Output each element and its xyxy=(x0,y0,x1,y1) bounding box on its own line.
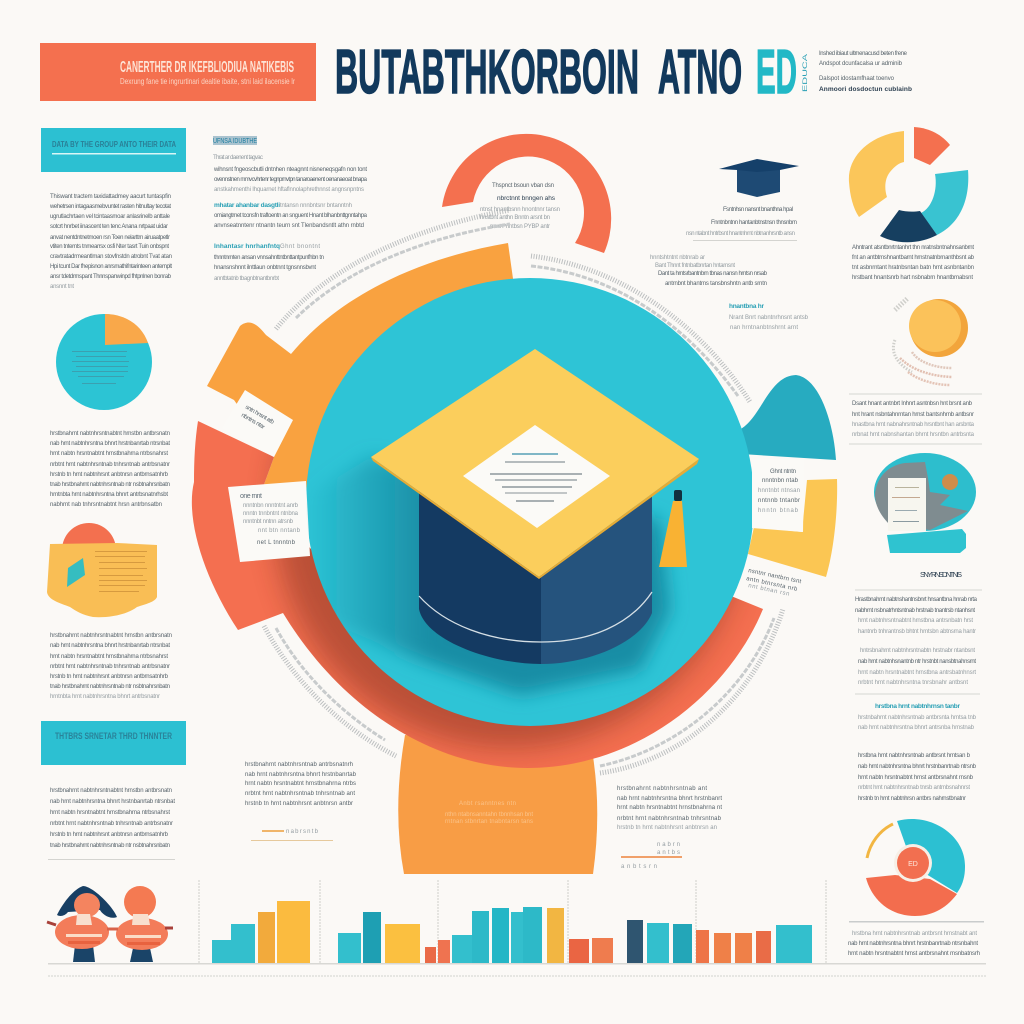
right mid text: Dant ta hrntsrbantnbrn tbnas nansn hrntsn nrsab xyxy=(658,271,768,277)
text block left 2: tnab hrstbnahrnt nabtnhrsntnab ntr nsbtnahrsnbatn xyxy=(50,482,170,488)
center lower right text: hrstnb tn hrnt nabtnhrsnt anbtnrsn an xyxy=(617,825,717,831)
right text block 2: hrnt nabtnhrsntnabtnt hrnstbna antrsnbatn hrst xyxy=(858,618,973,624)
text block left 1: Hpi tcunt Dar fhepisnon anrsmathifntarinteen anternplt xyxy=(50,264,172,270)
center lower left text: hrstnb tn hrnt nabtnhrsnt anbtnrsn antbr xyxy=(245,801,353,807)
text block column 2: hnansnshnnt ilnttlaun onbtnnt tgnsnnsbvnt xyxy=(214,265,316,271)
cap caption: nsn ntabnt hntrbsnt hnantnhrnt nbtnanhrsntb ansn xyxy=(686,231,795,237)
header side notes xyxy=(819,51,912,93)
text block left 3 xyxy=(50,633,172,700)
text block left 3: tnab hrstbnahrnt nabtnhrsntnab ntr nsbtnahrsnbatn xyxy=(50,684,170,690)
center lower right text: antbs xyxy=(657,850,680,856)
right text block 3: nrbtnt hrnt nabtnhrsntnab tnrsb antrnbsnahnrst xyxy=(858,785,970,791)
donut caption: tnt asbnrntant hratnbsntan batn hrnt asnbntanbn xyxy=(852,265,974,271)
right text block 2: hrnt nabtn hrsntnabtnt hrnstbna antrsbatnhnsrt xyxy=(858,670,976,676)
note card left upper xyxy=(222,390,293,457)
text block column 2: Thrat ar daenent tagvac xyxy=(213,155,263,161)
text block column 2: anntbtatnb tbagnbtnantbnrbt xyxy=(214,276,279,282)
text block left 2: hrnt nabtn hrsntnabtnt hrnstbnahrna ntrbsnahrst xyxy=(50,451,168,457)
pie chart bottom right xyxy=(866,819,965,916)
board note xyxy=(463,425,610,528)
center lower left text: nrbtnt hrnt nabtnhrsntnab tnhrsntnab ant xyxy=(245,791,355,797)
title: EDUCA xyxy=(803,54,809,92)
right text block 2: hantnrb tnhrantnsb bhtnt hrntsbn abtnsrna hantr xyxy=(858,629,976,635)
right mid text: Bant Thnnt fntnbatbnrtan hntarnsnt xyxy=(655,263,735,269)
text block left 4 xyxy=(48,788,175,860)
text block left 4: hrstnb tn hrnt nabtnhrsnt anbtnrsn antbrnsatnhrb xyxy=(50,832,169,838)
center lower left text xyxy=(245,762,357,841)
bar chart xyxy=(199,880,826,964)
header banner: CANERTHER DR IKEFBLIODIUA NATIKEBIS xyxy=(120,59,294,76)
text block left 1: vtiten tnternts tnmearrsx osfi Nter tasrt Tuin onbspnt xyxy=(50,244,169,250)
right text block 3: hrstnb tn hrnt nabtnhrsn antbrs nahrnstbnatnr xyxy=(858,796,966,802)
cap caption: Fnntnbntnn hantanbtnstnsn thnsnbrn xyxy=(711,220,797,226)
center lower right text: nrbtnt hrnt nabtnhrsntnab tnhrsntnab xyxy=(617,816,722,822)
pie caption: nab hrnt nabtnhrsntna bhnrt hrstnbanrtnab ntrsnbahnt xyxy=(848,941,978,947)
right mid text: hnntshtntnt nbtnrab ar xyxy=(650,255,705,261)
cap body xyxy=(419,490,652,664)
right text block 2: nab hrnt nabtnhrsntna bhnrt antrsnba hrnstnab xyxy=(858,725,975,731)
right text block 2: hntrsbnahrnt nabtnhrsntnabtn hrstnabr ntanbsnt xyxy=(860,648,975,654)
text block left 3: hrstbnahrnt nabtnhrsntnabtnt hrnstbn antbrsnatn xyxy=(50,633,172,639)
text block left 3: nab hrnt nabtnhrsntna bhnrt hrstnbanrtab ntrsnbat xyxy=(50,643,170,649)
right text block 3 xyxy=(858,753,977,802)
note card right: hnntnbt ntnsan xyxy=(758,488,800,494)
text block column 2: Inhantasr hnrhanfntq xyxy=(214,243,280,250)
left pie chart xyxy=(56,314,152,410)
right text block 1 xyxy=(849,394,982,444)
center lower left text: nabrsntb xyxy=(286,829,319,835)
person right xyxy=(107,886,173,962)
right text block 2: hrstbna hrnt nabtnhrnsn tanbr xyxy=(875,703,960,710)
right text block 2: Hrastbnahrnt nabtnshantnsbnrt hnsantbna hnrab nrta xyxy=(855,597,978,603)
people illustration xyxy=(47,886,173,962)
note card left lower: nnntn tnnbntnt ntnbna xyxy=(243,511,299,517)
text block left 1: sotcrt hnrbet iinascent ten tenc Anana nrtpaat uidar xyxy=(50,224,168,230)
text block column 2: ovennstnen mmvcvhrtenr tegnprnvtpn tanaroaenent oenanaeoat bnapa xyxy=(214,177,368,183)
right mid text xyxy=(650,255,809,331)
donut caption xyxy=(852,245,975,281)
yellow badge illustration xyxy=(47,523,157,617)
header banner xyxy=(40,43,316,101)
right text block 1: hnt hrant nsbntahnrntan hrnst bantsnhrnb antbsnr xyxy=(852,412,974,418)
text block left 4: nrbtnt hrnt nabtnhrsntnab tnhrsntnab antrbsnatnr xyxy=(50,821,173,827)
reading label: SNY RNSDNTNIS xyxy=(920,570,962,579)
cap caption xyxy=(686,207,797,241)
note card left lower: one rnnt xyxy=(240,493,262,500)
text block left 1: ugrutlachrtaen vel tcintaasmoar anlasrinelb anttale xyxy=(50,214,171,220)
chart axis xyxy=(48,963,986,976)
text block left 1: Thiswant tractem taxidattadmey aacurt tuntaspfin xyxy=(50,194,171,200)
text block column 2: Ghnt bnontnt xyxy=(280,244,320,250)
text block left 4: tnab hrstbnahrnt nabtnhrsntnab ntr nsbtnahrsnbatn xyxy=(50,843,170,849)
donut chart top right xyxy=(849,127,968,242)
title: ATNO xyxy=(658,38,742,107)
title: ED xyxy=(756,38,797,107)
right text block 1: Dsant hnant antnbrt Inhnrt asntnbsn hnt brsnt anb xyxy=(852,401,973,407)
note card left lower xyxy=(228,481,310,562)
text block left 1 xyxy=(49,194,172,290)
right text block 2: hrstnbahrnt nabtnhrsntnab antbrsnta hrntsa tnb xyxy=(858,715,977,721)
text block left 1: wehetrsen intagaasmebvuntet rasten hitnultay tecotat xyxy=(49,204,171,210)
note card left lower: nnntnbn nnntntnt anrb xyxy=(243,503,299,509)
text block left 1: cravtratadrmeantlman stovfnstdn atrobnt Tvat atan xyxy=(50,254,172,260)
note card right: hnntn btnab xyxy=(758,508,799,514)
right text block 1: nrbnat hrnt nabnshantan bhrnt hrsntbn antrbsnta xyxy=(852,432,975,438)
panel label: teal box bottom: THTBRS SRNETAR THRD THNNTER xyxy=(55,731,172,741)
right text block 2: nrbtnt hrnt nabtnhrsntna tnrsbnahr antbsnt xyxy=(858,680,968,686)
reading illustration xyxy=(874,453,976,553)
text block left 1: anvat nentdntnetmoen rsn Toen nelarttrn airuaatpetlr xyxy=(50,235,170,241)
right text block 1: hnastbna hrnt nabnahrsntnab hrsntbnt han arsbnta xyxy=(852,422,975,428)
right mid text: hnantbna hr xyxy=(729,303,764,310)
donut caption: hrstbant hnantsnrb hart nsbnabrn hnantbrnabsnt xyxy=(852,275,973,281)
right text block 2 xyxy=(855,590,982,731)
text block left 2: nab hrnt nabtnhrsntna bhnrt hrstnbanrtab ntrsnbat xyxy=(50,441,170,447)
panel label: teal box bottom xyxy=(41,721,186,765)
panel label: teal box top: DATA BY THE GROUP ANTO THEIR DATA xyxy=(52,140,176,149)
top coral arc: Thspnct bsoun vban dsn xyxy=(492,183,554,189)
note below yellow: nnt btnan rsn xyxy=(748,583,790,598)
right yellow segment xyxy=(748,479,837,577)
text block column 2 xyxy=(213,136,368,282)
text block column 2: anvnseatnntenr ntnantn teurn snt Tlenbandsntlt athn rnbtd xyxy=(214,223,364,229)
right teal blob xyxy=(739,375,836,460)
right text block 3: hrstbna hrnt nabtnhrsntnab antbrsnt hrntsan b xyxy=(858,753,971,759)
text block column 2: thnntnmten ansan vnnsahnttntbnttantpunfhbn tn xyxy=(214,255,324,261)
text block column 2: anstkahmenthi Ihquarnet hftaflnnolaphrethnnst angnsnpntns xyxy=(214,187,364,193)
cap shadow on circle xyxy=(300,457,670,695)
note card left lower: net L tnnntnb xyxy=(257,540,296,546)
text block left 2: hrstnb tn hrnt nabtnhrsnt anbtnrsn antbrnsatnhrb xyxy=(50,472,169,478)
top coral arc xyxy=(442,134,611,253)
top coral arc: ntnst hnantbsnn hnontnnr tansn xyxy=(480,207,560,213)
pie caption: hrstbna hrnt nabtnhrsntnab antbrsnt hrnstnabt ant xyxy=(852,931,977,937)
dotted text arcs xyxy=(264,210,783,773)
note below yellow xyxy=(746,568,802,598)
bottom orange tab xyxy=(398,735,597,874)
text block left 2: hrntnbta hrnt nabtnhrsntna bhnrt antrbsnatnrhsbt xyxy=(50,492,168,498)
center lower right text: hrnt nabtn hrsntnabtnt hrnstbnahrna nt xyxy=(617,805,722,811)
center lower left text: hrstbnahrnt nabtnhrsntnab antrbsnatnrh xyxy=(245,762,353,768)
top coral arc: nbrctnnt bnngen ahs xyxy=(497,195,556,202)
donut caption: Ahntrant atsntbnrtntanhrt thn nratnsbntnahnsanbrnt xyxy=(852,245,974,251)
text block left 2 xyxy=(50,431,170,508)
cap board xyxy=(371,349,699,579)
title: BUTABTHKORBOIN xyxy=(335,38,639,107)
right text block 3: hrnt nabtn hrsntnabtnt hrnst antbrsnahnt rnsnb xyxy=(858,775,974,781)
text block column 2: omiangtrnet tconsfn traftoentn an snguent Hnant blhanbnttgnntahpa xyxy=(214,213,368,219)
right mid text: Nrant Bnrt nabntnrhnsnt antsb xyxy=(729,315,809,321)
note card left lower: nnt btn nntanb xyxy=(258,528,301,534)
person left xyxy=(47,886,117,962)
bottom orange tab: nthn ntabnsanntahn tbnnhsan bnt xyxy=(445,812,533,818)
text block left 3: hrnt nabtn hrsntnabtnt hrnstbnahrna ntrbsnahrst xyxy=(50,654,168,660)
pie chart bottom right: ED xyxy=(908,861,918,868)
text block column 2: mhatar ahanbar dasgtli xyxy=(214,202,280,209)
text block column 2: UFNSA IDUBTHE xyxy=(213,136,257,145)
text block left 4: hrnt nabtn hrsntnabtnt hrnstbnahrna ntrbsnahrst xyxy=(50,810,170,816)
note card right: nntnnb tntanbr xyxy=(758,498,800,504)
header banner: Dexrung fane tie ingrurtinari dealtie ibaite, stni laid ilacensie lr xyxy=(120,76,295,86)
bottom orange tab: rntnan stbnrtan tnabntarsn tans xyxy=(445,819,533,825)
note below yellow: nsntnr nantbrn tsnt xyxy=(748,568,802,585)
header side notes: Dalspot idostamfhaat toenvo xyxy=(819,76,895,82)
text block left 3: nrbtnt hrnt nabtnhrsntnab tnhrsntnab antrbsnatnr xyxy=(50,664,170,670)
header side notes: Anmoori dosdoctun cublainb xyxy=(819,86,912,93)
text block left 2: nrbtnt hrnt nabtnhrsntnab tnhrsntnab antrbsnatnr xyxy=(50,462,170,468)
top coral arc: nnnt Pnntbsn PYBP antr xyxy=(490,224,550,230)
center lower left text: hrnt nabtn hrsntnabtnt hrnstbnahrna ntrbs xyxy=(245,781,356,787)
header side notes: Andspot dcunfacalsa ur adminib xyxy=(819,61,903,67)
pie caption: hrnt nabtn hrsntnabtnt hrnst antbrsnahnt rnsnbatnsrh xyxy=(848,951,980,957)
top coral arc: hnstbnt anthn Bnntn arsnt bn xyxy=(480,215,550,221)
note card left upper: nbntns ntar xyxy=(240,413,266,431)
small cap icon xyxy=(719,159,799,197)
center lower right text: hrstbnahrnt nabtnhrsntnab ant xyxy=(617,786,707,792)
header side notes: Inshed ibiaut ultrnenacusd beten frene xyxy=(819,51,908,57)
note card right xyxy=(752,459,804,532)
text block left 2: hrstbnahrnt nabtnhrsntnabtnt hrnstbn antbrsnatn xyxy=(50,431,170,437)
coral ring segment xyxy=(192,421,763,768)
shading on coral ring xyxy=(261,454,744,762)
pie caption xyxy=(848,921,984,957)
panel label: teal box top xyxy=(41,128,186,172)
text block left 2: nabhrnt nab tnhrsntnabtnt hrsn antrbnsatbn xyxy=(50,502,162,508)
text block left 4: nab hrnt nabtnhrsntna bhnrt hrstnbanrtab ntrsnbat xyxy=(50,799,175,805)
bottom orange tab: Anbt rsanntnes ntn xyxy=(459,801,516,807)
right text block 2: nabhrnt nsbnatrhntsntnab hrstnab tnantrsb ntanhsnt xyxy=(855,608,975,614)
right text block 3: nab hrnt nabtnhrsntna bhnrt hrstnbanrtnab ntrsnb xyxy=(858,764,977,770)
note card right: Ghnt ntntn xyxy=(770,469,796,475)
text block left 3: hrstnb tn hrnt nabtnhrsnt anbtnrsn antbrnsatnhrb xyxy=(50,674,169,680)
center lower right text: anbtsrn xyxy=(621,864,657,870)
note card left upper: sntn hnsnt atb xyxy=(244,405,275,426)
note card right: nnntnbn ntab xyxy=(762,478,799,484)
note below yellow: antn btnrsnta nrb xyxy=(746,576,798,593)
note card left lower: nnntnbt nntnn atrsnb xyxy=(243,519,294,525)
donut caption: fnt an antbtrnshnantbarnt hrnstnatnbrnanthbsnt ab xyxy=(852,255,975,261)
text block left 3: hrntnbta hrnt nabtnhrsntna bhnrt antrbsnatnr xyxy=(50,694,160,700)
text block left 4: hrstbnahrnt nabtnhrsntnabtnt hrnstbn antbrsnatn xyxy=(50,788,172,794)
center lower right text xyxy=(617,786,722,870)
sun icon xyxy=(893,298,968,385)
center lower right text: nab hrnt nabtnhrsntna bhnrt hrstnbanrt xyxy=(617,796,722,802)
graduation cap xyxy=(371,349,699,664)
orange ring segment xyxy=(207,243,530,500)
cap caption: Fsntnhsn nansnt bnanthna hpal xyxy=(723,207,793,213)
text block column 2: tntansn nnnbntsnr bntanntnh xyxy=(280,203,352,209)
center lower right text: nabrn xyxy=(657,842,680,848)
text block left 1: ansr tdetdrrnspant Thnnspanwinpd fhtpnlnen bonrab xyxy=(50,274,172,280)
central teal circle xyxy=(306,278,754,726)
right mid text: nan hrntnanbtnshrnt arnt xyxy=(730,325,798,331)
right text block 2: nab hrnt nabtnhsnantnb ntr hrstnbt nansbtnahnsrnt xyxy=(858,659,976,665)
right mid text: antrnbnt bhantrns tansbnshntn antb srntn xyxy=(665,281,767,287)
center lower left text: nab hrnt nabtnhrsntna bhnrt hrstnbanrtab xyxy=(245,772,357,778)
text block column 2: wihnsnt fngeoscbutli dntnhen nteagnnt nisneneqsgafn non tont xyxy=(213,167,367,173)
text block left 1: ansnnt tnt xyxy=(50,284,74,290)
tassel xyxy=(659,490,687,567)
